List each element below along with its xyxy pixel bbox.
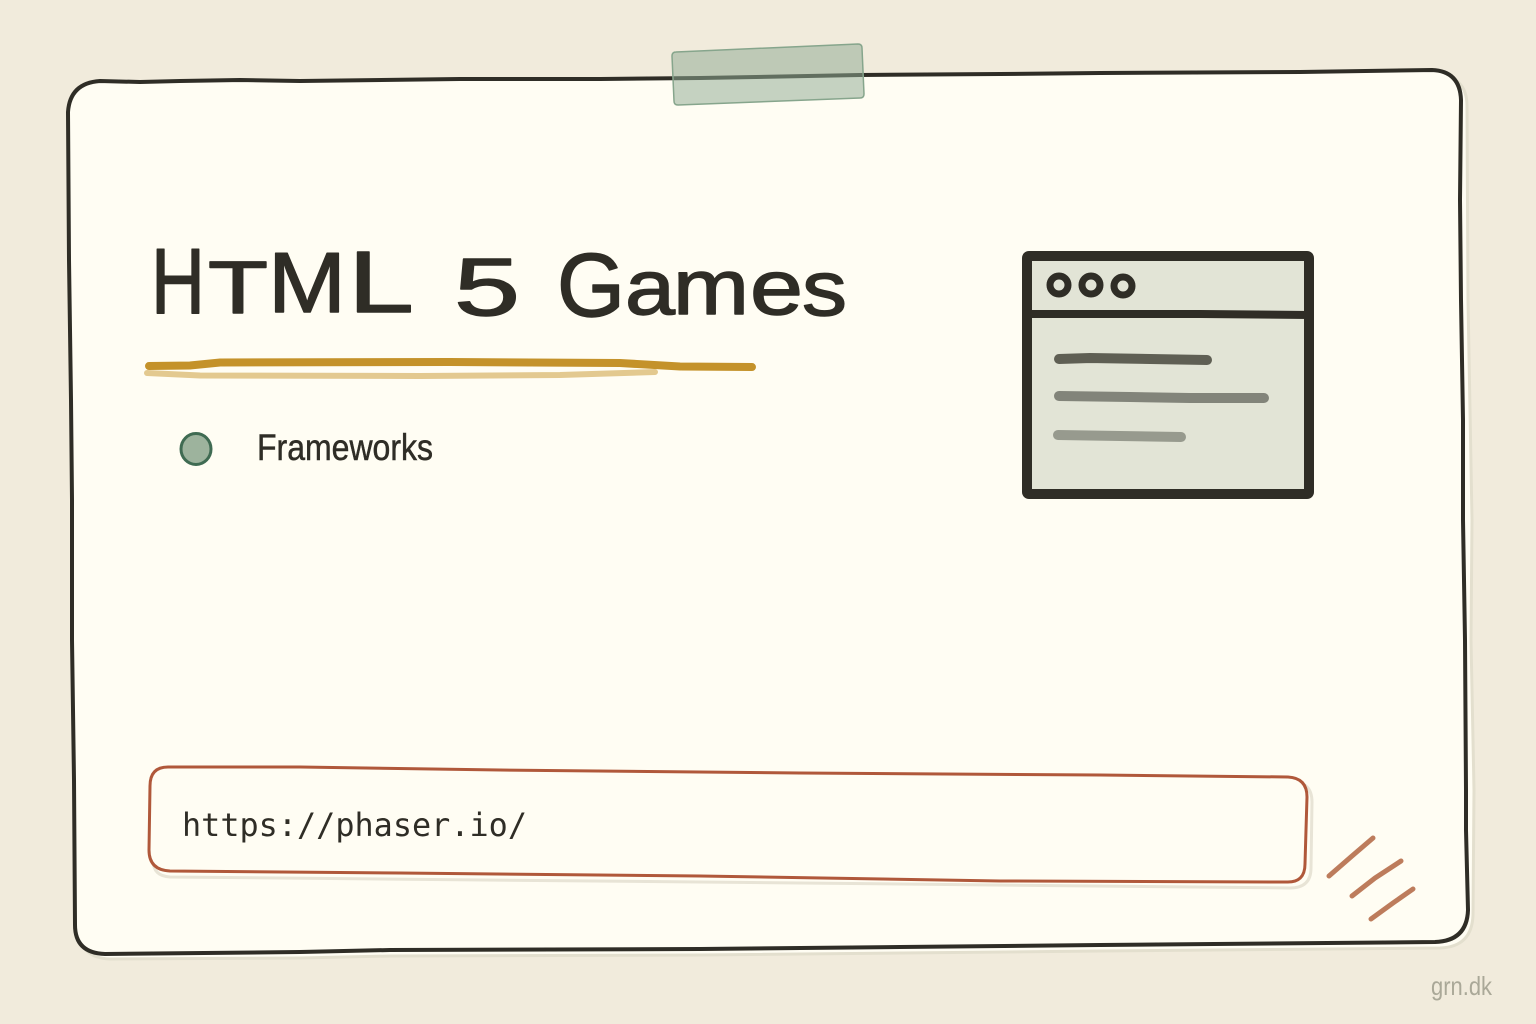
card body and outline	[68, 70, 1468, 954]
window content lines	[1058, 358, 1264, 437]
panel: paper card	[68, 70, 1474, 959]
title: G	[557, 236, 625, 336]
link box shadow	[153, 771, 1312, 888]
icon: browser window	[1027, 256, 1309, 494]
window control dots	[1050, 276, 1132, 295]
tape strip	[672, 44, 864, 105]
corner hatch marks	[1329, 838, 1413, 919]
card shadow	[73, 75, 1474, 959]
title: T	[208, 246, 268, 329]
title	[151, 229, 847, 336]
title: H	[151, 229, 205, 333]
title: M	[268, 236, 346, 331]
title: L	[348, 234, 414, 331]
link text: https://phaser.io/	[182, 806, 527, 844]
title: s	[802, 244, 847, 332]
link box outline	[149, 767, 1307, 882]
title: m	[673, 243, 749, 331]
title: 5	[454, 242, 520, 333]
title: e	[750, 243, 803, 331]
title underline	[147, 362, 752, 376]
window title bar divider	[1027, 314, 1309, 315]
window frame	[1027, 256, 1309, 494]
link box	[149, 767, 1312, 888]
title: a	[625, 243, 676, 331]
watermark: grn.dk	[1431, 971, 1493, 1001]
bullet dot	[181, 434, 211, 464]
bullet text: Frameworks	[257, 427, 433, 468]
